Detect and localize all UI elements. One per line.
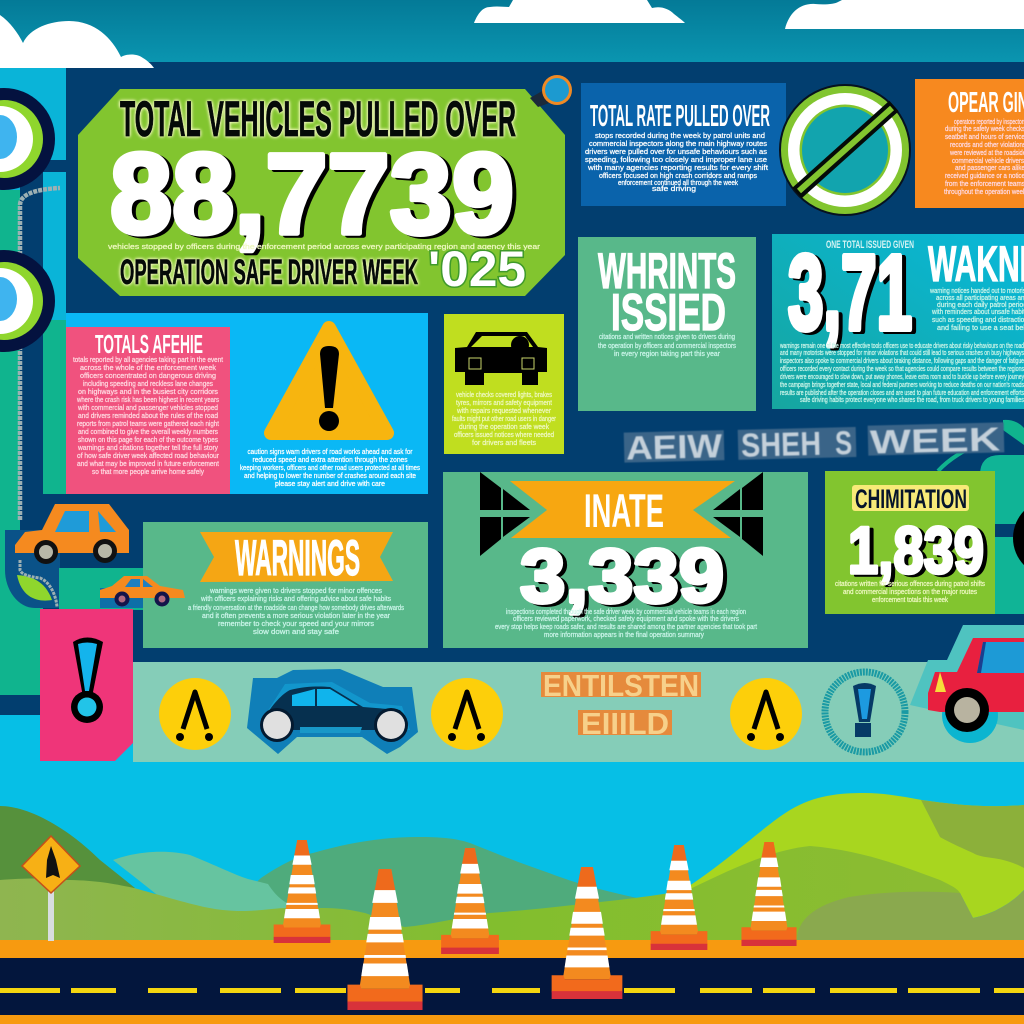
- icon: black arrows left: [480, 472, 530, 556]
- cloud right: [785, 0, 1024, 29]
- text block: [835, 581, 985, 604]
- text block: and it often prevents a more serious violation later in the year: [202, 613, 391, 620]
- lane markings: [0, 988, 1024, 993]
- text block: so that more people arrive home safely: [92, 469, 204, 476]
- text block: of how safe driver week affected road behaviour: [77, 453, 220, 460]
- number: 3,339: [520, 534, 724, 619]
- text block: [944, 119, 1024, 196]
- text block: safe driving: [652, 186, 696, 193]
- text block: more information appears in the final operation summary: [544, 632, 704, 639]
- text block lower: [779, 343, 1024, 404]
- icon: road sign: [22, 836, 80, 941]
- text block: and drivers reminded about the rules of the road: [78, 413, 218, 420]
- text block: totals reported by all agencies taking part in the event: [73, 357, 223, 364]
- panel: lime car: [444, 314, 564, 454]
- text block: the operation by officers and commercial inspectors: [598, 343, 736, 350]
- icon: prohibition sign: [780, 85, 910, 215]
- text: TOTAL RATE PULLED OVER: [590, 98, 770, 133]
- text block: [598, 334, 736, 358]
- text block: commercial inspectors along the main highway routes: [589, 141, 768, 148]
- pink exclamation tab: [40, 609, 133, 761]
- text block: faults might put other road users in danger: [452, 416, 557, 423]
- text block: enforcement continued all through the week: [618, 180, 738, 187]
- cone 4: [552, 867, 622, 999]
- cones: [274, 840, 797, 1010]
- heading: INATE: [584, 484, 664, 537]
- panel: writs issued: [578, 237, 756, 411]
- icon: lime leaf: [17, 575, 52, 601]
- icon: right wheel: [1013, 499, 1024, 577]
- text block: remember to check your speed and your mirrors: [218, 621, 375, 628]
- text block: warnings were given to drivers stopped for minor offences: [209, 588, 382, 595]
- panel: total vehicles pulled over: [78, 89, 565, 297]
- text block: officers reviewed paperwork, checked safety equipment and spoke with the drivers: [513, 616, 739, 623]
- icon: exclamation: [73, 638, 103, 697]
- icon: magnifier: [530, 75, 572, 107]
- text block: and combined to give the overall weekly numbers: [78, 429, 218, 436]
- panel: inate 3,339: [443, 472, 808, 648]
- ribbon: [510, 481, 735, 538]
- panel: warnings: [143, 522, 428, 648]
- panel: citations 1,839: [825, 471, 995, 614]
- heading: TOTALS AFEHIE: [95, 329, 203, 359]
- text block: during the operation safe week: [459, 424, 549, 431]
- text block: inspections completed through the safe driver week by commercial vehicle teams in each region: [506, 609, 746, 616]
- text block: keeping workers, officers and other road users protected at all times: [240, 465, 420, 472]
- text block: [452, 392, 557, 447]
- wheel icon upper: [0, 88, 55, 190]
- panel: pink totals: [66, 327, 230, 494]
- icon: car front: [455, 332, 547, 385]
- text block: officers focused on high crash corridors and ramps: [599, 173, 757, 180]
- cone 2: [347, 869, 423, 1010]
- top teal band: [0, 0, 1024, 62]
- panel: warnings: WARNINGS: [235, 530, 360, 586]
- text block: warnings and citations together tell the full story: [77, 445, 218, 452]
- grey banner new week: [624, 420, 1004, 467]
- big number: 88,7739: [110, 131, 514, 258]
- icon: yellow alert 3: [730, 678, 802, 750]
- icon: teal ring exclamation: [825, 672, 905, 752]
- grey banner new week: AEIW: [626, 427, 723, 467]
- number: 1,839: [848, 513, 984, 587]
- label: eiild: EIIILD: [581, 706, 669, 741]
- text block: across the whole of the enforcement week: [80, 365, 217, 372]
- small text line: vehicles stopped by officers during the enforcement period across every participating region and agency this year: [108, 244, 541, 251]
- text block: for drivers and fleets: [472, 440, 536, 447]
- text block: with repairs requested whenever: [456, 408, 552, 415]
- grey banner new week: WEEK: [870, 420, 1001, 461]
- cone 6: [741, 842, 797, 946]
- year: '025: [428, 241, 526, 297]
- cone 3: [441, 848, 499, 954]
- text block: vehicle checks covered lights, brakes: [456, 392, 552, 399]
- cone 5: [651, 845, 707, 950]
- label: [852, 485, 969, 511]
- text block: on highways and in the busiest city corridors: [78, 389, 218, 396]
- text block: reduced speed and extra attention through the zones: [252, 457, 408, 464]
- text block: citations written for serious offences during patrol shifts: [835, 581, 985, 588]
- band: lower pale green: [133, 662, 1024, 762]
- text block: drivers were pulled over for unsafe behaviours such as: [585, 149, 768, 156]
- text block: caution signs warn drivers of road works ahead and ask for: [248, 449, 413, 456]
- text block: with commercial and passenger vehicles stopped: [77, 405, 218, 412]
- icon: yellow alert 2: [431, 678, 503, 750]
- teal side block: [980, 455, 1024, 614]
- gravel curve by leaf: [20, 560, 57, 607]
- text block: officers issued notices where needed: [454, 432, 554, 439]
- text block: with many agencies reporting results for every shift: [587, 165, 768, 172]
- text block right: [929, 288, 1024, 332]
- wheel icon lower: [0, 250, 55, 352]
- text block: in every region taking part this year: [614, 351, 721, 358]
- icon: small orange car: [100, 576, 185, 606]
- text block: where the crash risk has been highest in recent years: [76, 397, 219, 404]
- panel: total vehicles pulled over: TOTAL VEHICLES PULLED OVER: [120, 91, 516, 147]
- panel: warnings 3,71: [772, 234, 1024, 409]
- text block right: and failing to use a seat belt: [937, 325, 1024, 332]
- text block: shown on this page for each of the outcome types: [78, 437, 218, 444]
- left column background: [0, 62, 190, 715]
- navy board: [66, 62, 1024, 662]
- cloud centre: [474, 0, 685, 23]
- small heading: ONE TOTAL ISSUED GIVEN: [826, 239, 914, 251]
- number: 3,71: [788, 234, 912, 352]
- text block: [240, 449, 420, 488]
- text block: please stay alert and drive with care: [275, 481, 385, 488]
- text block: reports from patrol teams were gathered each night: [77, 421, 219, 428]
- label: entilsten: ENTILSTEN: [543, 668, 699, 703]
- panel: blue total: [581, 83, 786, 206]
- black wheel edge: [995, 524, 1017, 537]
- icon: warning triangle: [271, 328, 387, 433]
- icon: orange car: [15, 504, 129, 564]
- cone 1: [274, 840, 330, 943]
- heading: CHIMITATION: [855, 484, 967, 514]
- text block: and commercial inspections on the major routes: [843, 589, 977, 596]
- text block: and helping to lower the number of crashes around each site: [244, 473, 416, 480]
- panel: cyan warning: [66, 313, 428, 494]
- heading line 2: ISSIED: [611, 284, 726, 342]
- road: [0, 940, 1024, 1024]
- text block: a friendly conversation at the roadside can change how somebody drives afterwards: [188, 605, 404, 612]
- text block: [495, 609, 757, 639]
- green connector: [938, 424, 1003, 471]
- text block: tyres, mirrors and safety equipment: [456, 400, 552, 407]
- text block: [188, 588, 404, 636]
- icon: red car: [910, 625, 1024, 743]
- text block: enforcement totals this week: [872, 597, 948, 604]
- scene: hills: [0, 793, 1024, 945]
- roadside gravel path: [20, 188, 60, 520]
- text block: speeding, following too closely and improper lane use: [585, 157, 767, 164]
- ribbon: [200, 532, 393, 582]
- subheading: OPERATION SAFE DRIVER WEEK: [120, 253, 418, 292]
- text block: including speeding and reckless lane changes: [83, 381, 213, 388]
- band top curve: [1003, 420, 1024, 445]
- icon: yellow alert 1: [159, 678, 231, 750]
- grey banner new week: SHEH: [741, 425, 821, 464]
- text block: slow down and stay safe: [253, 629, 339, 636]
- text block: [585, 133, 768, 193]
- text block: and what may be improved in future enforcement: [77, 461, 219, 468]
- text block: officers concentrated on dangerous driving: [80, 373, 216, 380]
- text block: with officers explaining risks and offering advice about safe habits: [200, 596, 391, 603]
- panel: orange: [915, 79, 1024, 208]
- icon: black arrows right: [713, 472, 763, 556]
- text block: citations and written notices given to drivers during: [599, 334, 735, 341]
- text block: every stop helps keep roads safer, and results are shared among the partner agencies that took part: [495, 624, 757, 631]
- grey banner new week: S: [835, 424, 852, 461]
- text block: stops recorded during the week by patrol units and: [595, 133, 765, 140]
- cloud left: [0, 15, 154, 68]
- heading: WHRINTS: [598, 243, 736, 299]
- text block: [73, 357, 223, 476]
- icon: blue car: [247, 669, 418, 754]
